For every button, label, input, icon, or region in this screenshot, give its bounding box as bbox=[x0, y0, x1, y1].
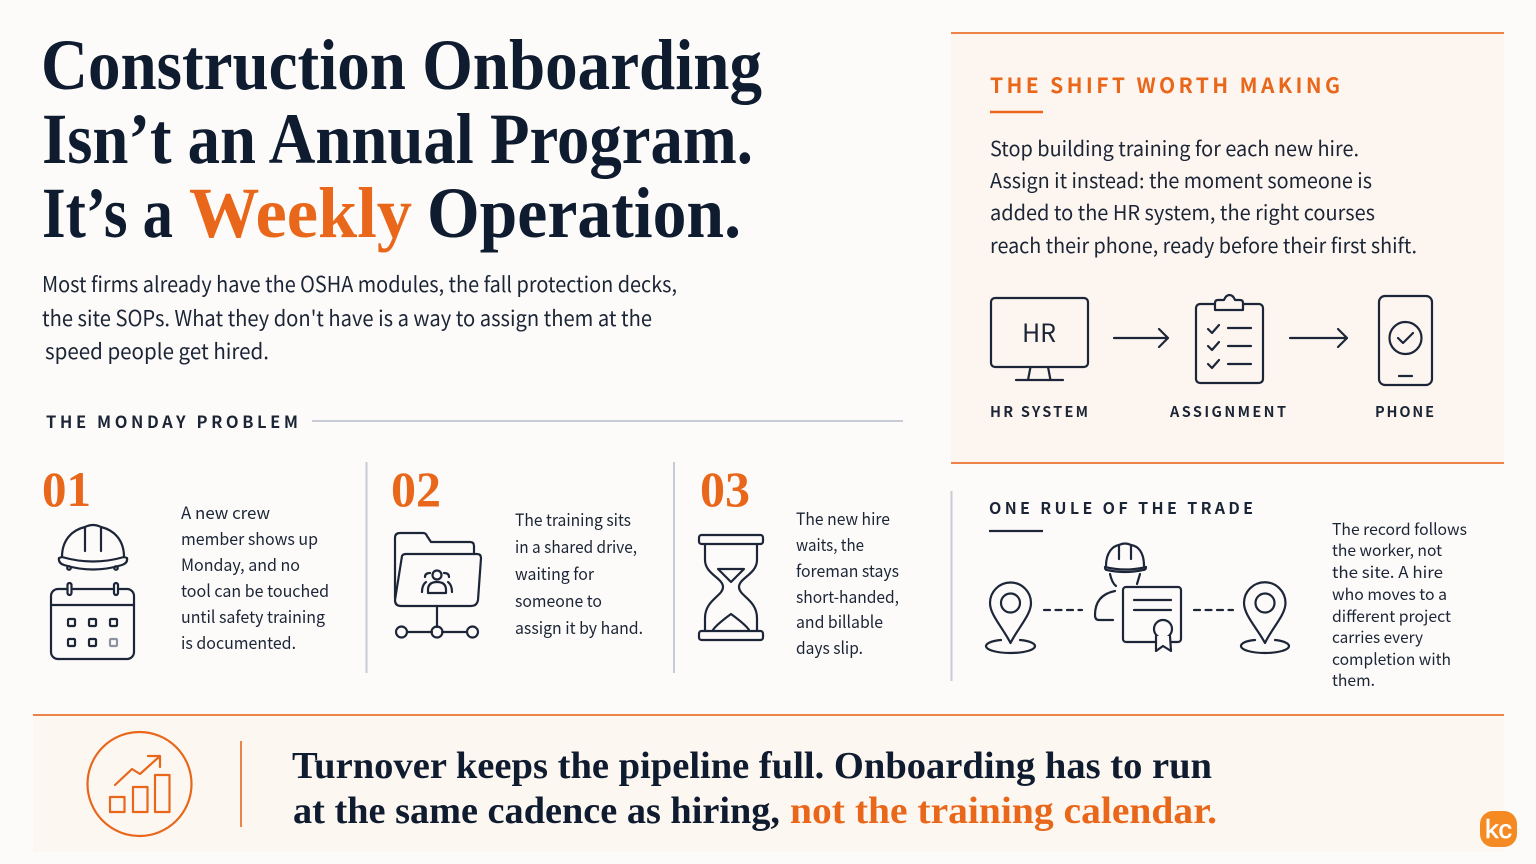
title: It’s a bbox=[42, 173, 173, 253]
flow labels: HR SYSTEM bbox=[990, 401, 1088, 422]
text: problem 03: The new hire bbox=[796, 506, 890, 530]
panel: bottom takeaway bbox=[33, 715, 1504, 852]
shift description: Assign it instead: the moment someone is bbox=[990, 164, 1372, 194]
flow labels: PHONE bbox=[1375, 401, 1434, 422]
intro paragraph: speed people get hired. bbox=[45, 335, 269, 366]
title: Weekly bbox=[189, 173, 412, 253]
shift description: Stop building training for each new hire. bbox=[990, 132, 1359, 162]
text: problem 01: member shows up bbox=[181, 526, 318, 550]
text: problem 03: waits, the bbox=[796, 532, 864, 556]
text: problem 01 bbox=[181, 500, 329, 654]
arrow: HR to assignment bbox=[1114, 329, 1168, 347]
flow labels bbox=[990, 401, 1434, 422]
panel: the shift worth making bbox=[951, 33, 1504, 463]
intro paragraph: the site SOPs. What they don't have is a way to assign them at the bbox=[42, 302, 652, 333]
logo: kc: kc bbox=[1485, 814, 1512, 844]
rule description: completion with bbox=[1332, 646, 1451, 670]
icon: calendar bbox=[51, 583, 134, 659]
title: Construction Onboarding bbox=[41, 25, 762, 105]
text: problem 03: days slip. bbox=[796, 635, 863, 659]
text: problem 03: foreman stays bbox=[796, 558, 899, 582]
intro paragraph: Most firms already have the OSHA modules, the fall protection decks, bbox=[42, 268, 677, 299]
logo: kc bbox=[1480, 811, 1517, 847]
panel: problem 02 bbox=[391, 461, 643, 639]
text: problem 01: A new crew bbox=[181, 500, 271, 524]
icon: phone with check bbox=[1379, 296, 1432, 385]
icon: hourglass bbox=[699, 535, 763, 640]
text: problem 02 bbox=[515, 507, 643, 639]
text: problem 01: Monday, and no bbox=[181, 552, 300, 576]
title bbox=[41, 25, 762, 253]
arrow: assignment to phone bbox=[1290, 329, 1347, 347]
heading: the shift worth making: THE SHIFT WORTH MAKING bbox=[990, 70, 1340, 100]
rule description: them. bbox=[1332, 667, 1375, 691]
rule description: the site. A hire bbox=[1332, 559, 1443, 583]
icon: HR monitor: HR bbox=[1022, 314, 1056, 350]
rule description: the worker, not bbox=[1332, 537, 1442, 561]
text: problem 01: tool can be touched bbox=[181, 578, 329, 602]
intro paragraph bbox=[42, 268, 677, 366]
text: problem 01: is documented. bbox=[181, 630, 296, 654]
icon: record follows worker between sites bbox=[986, 544, 1289, 653]
icon: HR monitor bbox=[991, 298, 1088, 380]
title: Isn’t an Annual Program. bbox=[42, 99, 753, 179]
text: problem 02: someone to bbox=[515, 588, 602, 612]
takeaway statement: not the training calendar. bbox=[790, 790, 1217, 832]
rule description: who moves to a bbox=[1332, 581, 1447, 605]
section heading: the monday problem: THE MONDAY PROBLEM bbox=[46, 409, 298, 433]
text: problem 03 bbox=[796, 506, 899, 659]
takeaway statement bbox=[292, 745, 1217, 832]
takeaway statement: Turnover keeps the pipeline full. Onboarding has to run bbox=[292, 745, 1212, 787]
shift description bbox=[990, 132, 1417, 259]
number 01: 01 bbox=[42, 461, 91, 517]
icon: shared folder network bbox=[395, 533, 481, 638]
text: problem 02: assign it by hand. bbox=[515, 615, 643, 639]
heading: one rule of the trade: ONE RULE OF THE TRADE bbox=[989, 495, 1253, 519]
text: problem 02: waiting for bbox=[515, 561, 594, 585]
takeaway statement: at the same cadence as hiring, bbox=[293, 790, 780, 832]
rule description: The record follows bbox=[1332, 516, 1467, 540]
title: Operation. bbox=[427, 173, 741, 253]
rule description: different project bbox=[1332, 603, 1451, 627]
flow labels: ASSIGNMENT bbox=[1169, 401, 1286, 422]
icon: growth chart in circle bbox=[88, 732, 192, 836]
number 03: 03 bbox=[700, 461, 750, 517]
icon: hard hat bbox=[59, 525, 127, 570]
rule description bbox=[1332, 516, 1467, 691]
shift description: reach their phone, ready before their first shift. bbox=[990, 229, 1417, 259]
panel: problem 01 bbox=[42, 461, 329, 659]
icon: assignment clipboard bbox=[1196, 295, 1263, 383]
panel: one rule of the trade bbox=[986, 495, 1467, 691]
number 02: 02 bbox=[391, 461, 441, 517]
rule description: carries every bbox=[1332, 624, 1424, 648]
shift description: added to the HR system, the right courses bbox=[990, 196, 1375, 226]
text: problem 03: short-handed, bbox=[796, 584, 899, 608]
text: problem 03: and billable bbox=[796, 609, 883, 633]
text: problem 02: in a shared drive, bbox=[515, 534, 637, 558]
text: problem 01: until safety training bbox=[181, 604, 326, 628]
text: problem 02: The training sits bbox=[515, 507, 631, 531]
panel: problem 03 bbox=[699, 461, 899, 659]
